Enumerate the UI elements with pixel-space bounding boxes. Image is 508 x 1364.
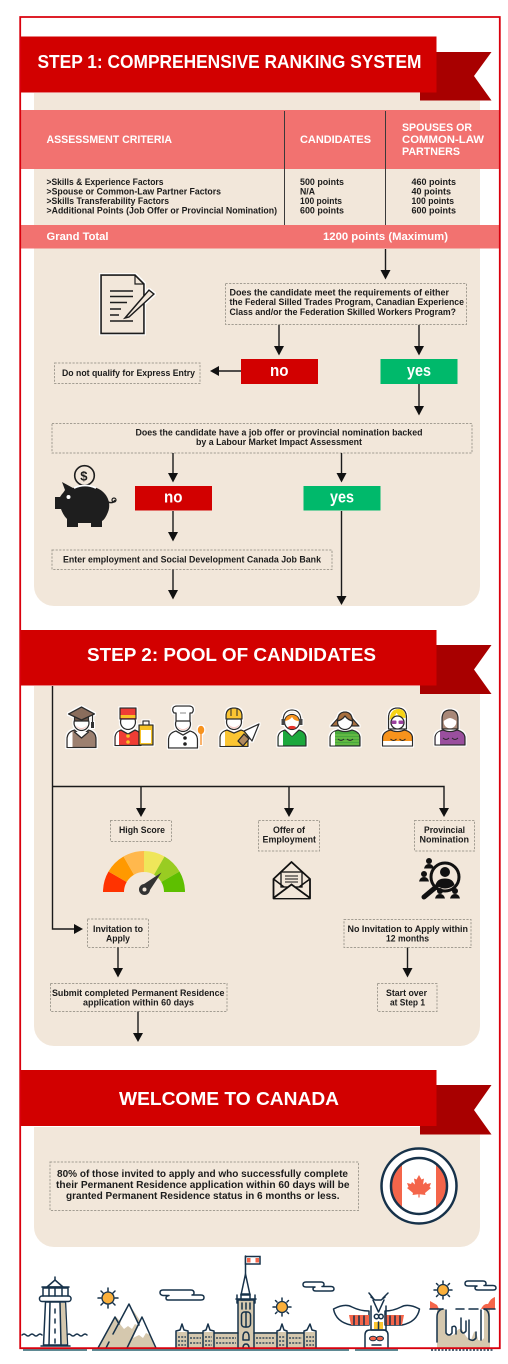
table: assessment criteria: 40 points xyxy=(412,186,451,196)
text box: no invitation: 12 months xyxy=(386,934,429,944)
text box: submit application: application within 60 days xyxy=(83,998,194,1008)
skyline: waterfall cliffs xyxy=(430,1297,495,1350)
banner: welcome to canada xyxy=(20,1070,492,1134)
arrow: yes to step 2 xyxy=(336,511,346,605)
button: no: no xyxy=(270,361,288,380)
table: assessment criteria: SPOUSES OR xyxy=(402,122,472,134)
arrow: job bank to step 2 xyxy=(168,570,178,600)
icon: canadian flag badge xyxy=(382,1148,456,1224)
table: assessment criteria: PARTNERS xyxy=(402,146,460,158)
button: yes: yes xyxy=(407,361,431,380)
skyline: cloud xyxy=(465,1281,496,1290)
table: assessment criteria: 100 points xyxy=(412,196,454,206)
text box: permanent residence statistic: their Permanent Residence application within 60 days will be xyxy=(56,1180,350,1191)
skyline: ground line xyxy=(23,1349,398,1351)
text box: job bank xyxy=(52,550,332,570)
table: assessment criteria: Grand Total xyxy=(46,231,108,243)
banner: step 1: STEP 1: COMPREHENSIVE RANKING SYSTEM xyxy=(38,51,422,72)
text box: provincial nomination: Nomination xyxy=(420,834,469,844)
text box: do not qualify xyxy=(54,363,200,384)
button: no xyxy=(135,486,212,510)
text box: start over: at Step 1 xyxy=(390,998,425,1008)
arrow: to high score xyxy=(136,808,146,817)
skyline: sun xyxy=(434,1281,452,1299)
icon: woman in purple xyxy=(435,710,465,745)
text box: offer of employment: Employment xyxy=(262,834,316,844)
icon: magnifier with people xyxy=(419,858,460,898)
button: yes xyxy=(304,486,380,510)
text box: submit application: Submit completed Permanent Residence xyxy=(52,988,224,998)
table: assessment criteria: 100 points xyxy=(300,196,342,206)
icon: builder xyxy=(220,708,259,746)
text box: submit application xyxy=(50,984,227,1012)
text box: second question: Does the candidate have a job offer or provincial nomination backed xyxy=(136,428,422,438)
text box: provincial nomination xyxy=(414,820,474,851)
text box: first eligibility question xyxy=(226,284,466,324)
arrow: yes to second question xyxy=(414,384,424,416)
text box: second question: by a Labour Market Impact Assessment xyxy=(196,437,362,447)
arrow: table to first question xyxy=(380,249,390,280)
banner: welcome to canada: WELCOME TO CANADA xyxy=(119,1088,339,1109)
icon: call centre agent xyxy=(278,710,306,746)
icon: bellhop xyxy=(115,708,153,746)
arrow: no invitation to start over xyxy=(402,948,412,978)
connector: pool to invitation xyxy=(52,686,83,934)
text box: start over: Start over xyxy=(386,988,427,998)
text box: permanent residence statistic: granted Permanent Residence status in 6 months or less. xyxy=(66,1191,340,1202)
icon: piggy bank: $ xyxy=(80,468,88,484)
table: assessment criteria: 1200 points (Maximum) xyxy=(323,231,448,243)
arrow: no to job bank xyxy=(168,511,178,542)
table: assessment criteria: 460 points xyxy=(412,177,456,187)
panel: welcome background xyxy=(34,1127,480,1247)
text box: permanent residence statistic xyxy=(50,1162,358,1210)
arrow: question to no xyxy=(274,325,284,356)
text box: invitation to apply xyxy=(88,919,148,948)
arrow: submit to welcome xyxy=(133,1012,143,1042)
skyline: sun xyxy=(273,1298,291,1316)
arrow: to offer of employment xyxy=(284,808,294,817)
icon: envelope xyxy=(274,862,310,898)
table: assessment criteria xyxy=(21,110,499,248)
table: assessment criteria: 600 points xyxy=(300,205,344,215)
icon: chef xyxy=(168,706,204,748)
text box: start over xyxy=(378,984,437,1012)
icon: piggy bank xyxy=(55,466,116,527)
text box: high score xyxy=(110,820,172,842)
table: assessment criteria: >Skills Transferability Factors xyxy=(46,196,169,206)
skyline: cloud xyxy=(303,1282,334,1291)
panel: step 2 background xyxy=(34,686,480,1046)
skyline: mountains xyxy=(98,1304,156,1348)
text box: permanent residence statistic: 80% of those invited to apply and who successfully complete xyxy=(57,1169,348,1180)
table: assessment criteria: 500 points xyxy=(300,177,344,187)
text box: offer of employment: Offer of xyxy=(273,825,306,835)
text box: provincial nomination: Provincial xyxy=(424,825,465,835)
table: assessment criteria: >Additional Points (Job Offer or Provincial Nomination) xyxy=(46,205,277,215)
panel: step 1 background xyxy=(34,93,480,606)
arrow: to provincial nomination xyxy=(439,808,449,817)
button: no xyxy=(241,359,318,384)
table: assessment criteria: ASSESSMENT CRITERIA xyxy=(46,134,172,146)
connector: branch line xyxy=(52,786,444,808)
table: assessment criteria: N/A xyxy=(300,186,315,196)
arrow: second question to yes xyxy=(336,453,346,482)
table: assessment criteria: 600 points xyxy=(412,205,456,215)
arrow: second question to no xyxy=(168,453,178,482)
text box: no invitation xyxy=(344,920,471,948)
button: yes xyxy=(380,359,458,384)
skyline: cloud xyxy=(160,1290,204,1300)
banner: step 2: STEP 2: POOL OF CANDIDATES xyxy=(87,644,376,665)
arrow: invitation to submit xyxy=(113,948,123,978)
skyline: lighthouse xyxy=(22,1277,87,1346)
text box: first eligibility question: the Federal Silled Trades Program, Canadian Experience xyxy=(230,297,464,307)
text box: invitation to apply: Apply xyxy=(106,934,130,944)
icon: woman with pigtails xyxy=(330,712,360,746)
text box: do not qualify: Do not qualify for Express Entry xyxy=(62,368,195,378)
text box: no invitation: No Invitation to Apply within xyxy=(348,924,468,934)
banner: step 1 xyxy=(20,36,492,100)
button: no: no xyxy=(164,488,182,506)
icon: score gauge xyxy=(103,851,185,895)
table: assessment criteria: CANDIDATES xyxy=(300,134,371,146)
text box: invitation to apply: Invitation to xyxy=(93,924,143,934)
table: assessment criteria: >Spouse or Common-Law Partner Factors xyxy=(46,186,221,196)
text box: first eligibility question: Class and/or the Federation Skilled Workers Program? xyxy=(230,307,456,317)
text box: second question xyxy=(52,424,472,453)
icon: document and pencil xyxy=(101,275,154,334)
text box: high score: High Score xyxy=(119,825,165,835)
text box: job bank: Enter employment and Social Development Canada Job Bank xyxy=(63,554,322,564)
button: yes: yes xyxy=(330,488,354,506)
table: assessment criteria: >Skills & Experience Factors xyxy=(46,177,164,187)
icon: graduate xyxy=(67,707,96,748)
table: assessment criteria: COMMON-LAW xyxy=(402,134,485,146)
skyline: sun xyxy=(98,1288,118,1308)
banner: step 2 xyxy=(20,630,492,694)
icon: blonde woman with sunglasses xyxy=(382,708,412,746)
arrow: question to yes xyxy=(414,325,424,356)
skyline: parliament building xyxy=(176,1256,316,1348)
text box: first eligibility question: Does the candidate meet the requirements of either xyxy=(230,288,449,298)
arrow: no to disqualified xyxy=(210,366,241,376)
text box: offer of employment xyxy=(258,820,320,851)
skyline: totem pole xyxy=(334,1293,420,1348)
